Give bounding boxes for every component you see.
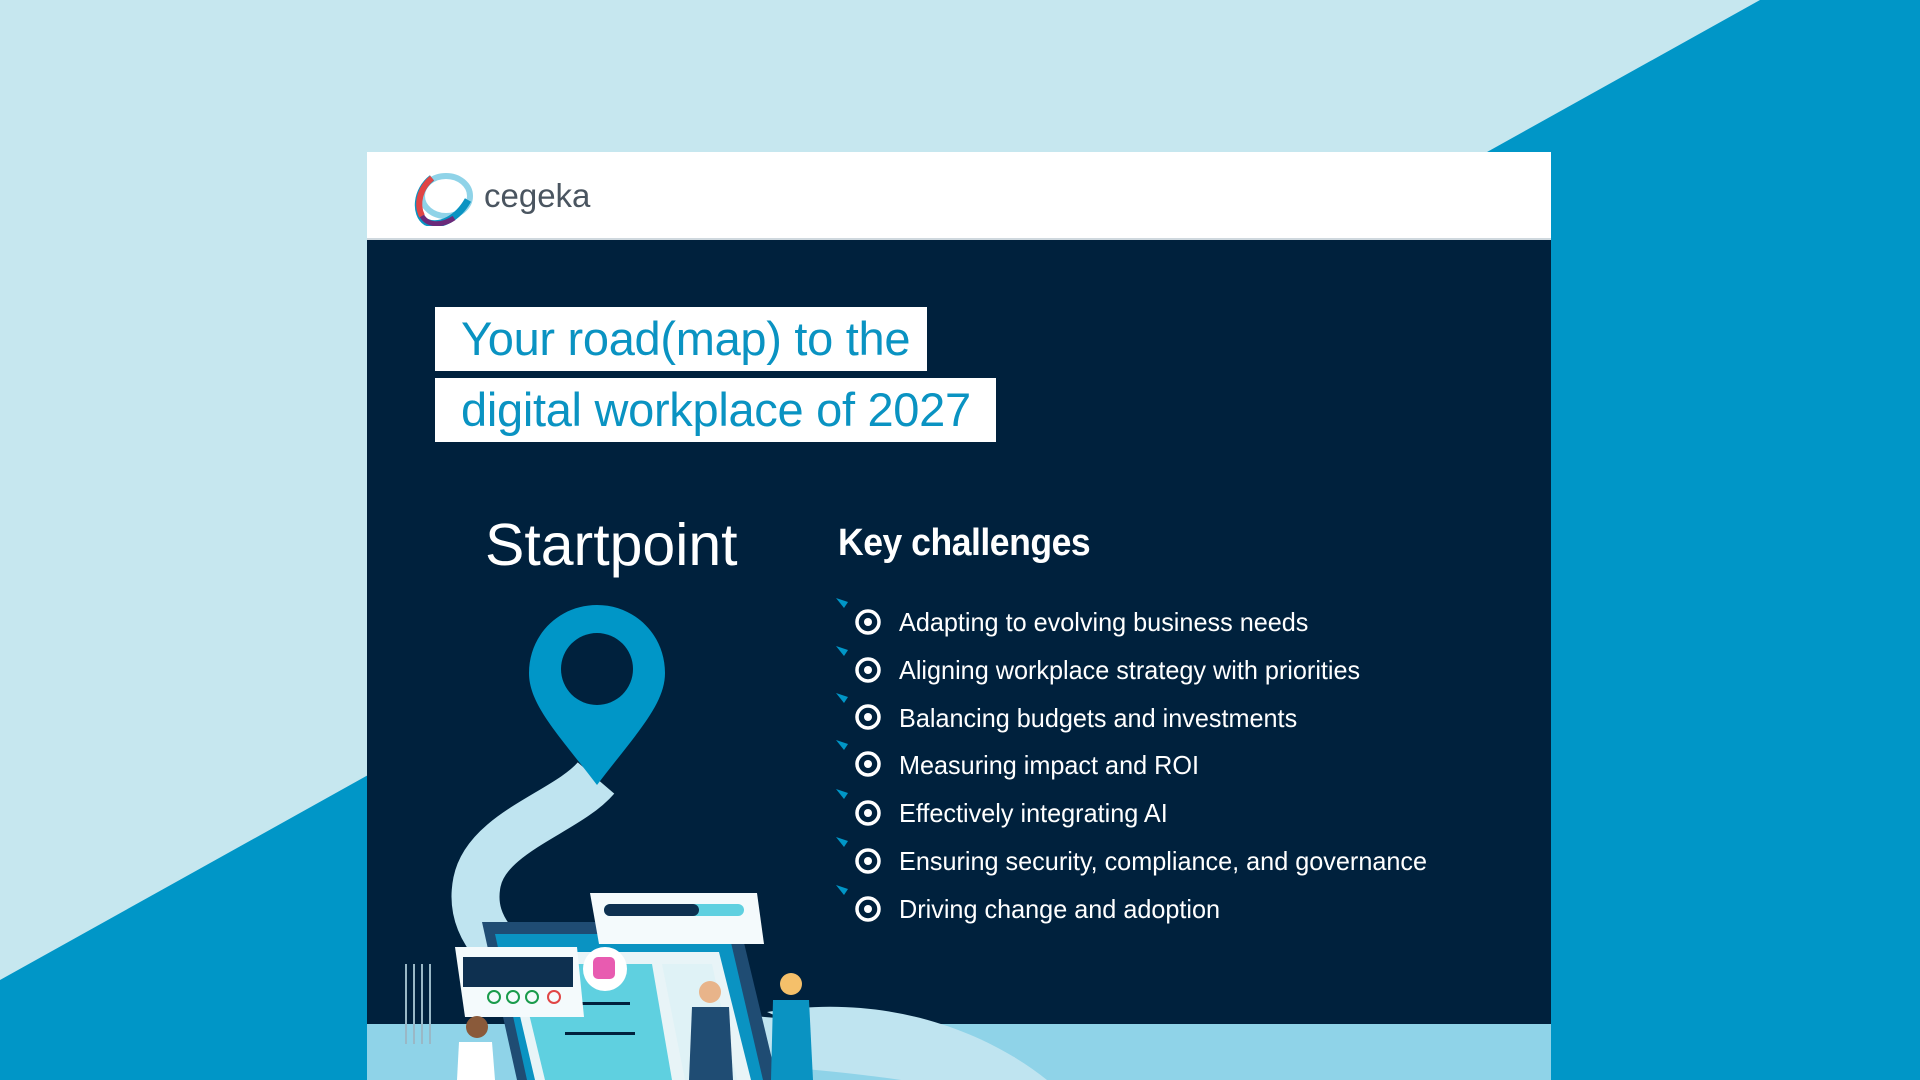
monitor (482, 922, 777, 1080)
dots (405, 964, 431, 1044)
title (435, 307, 996, 442)
logo (414, 173, 590, 226)
list: challenges: Adapting to evolving business needs (899, 607, 1308, 637)
people (466, 1016, 488, 1038)
list: challenges: Driving change and adoption (899, 894, 1220, 924)
card (367, 152, 1551, 1080)
icon: cegeka swirl (414, 173, 473, 226)
list: challenges: Effectively integrating AI (899, 798, 1168, 828)
heading: startpoint: Startpoint (485, 512, 738, 578)
logo text: cegeka (484, 177, 590, 214)
icon: location pin (529, 605, 665, 785)
popups (455, 947, 584, 1017)
list: challenges: Ensuring security, compliance, and governance (899, 846, 1427, 876)
header bar (367, 152, 1551, 240)
list: challenges: Balancing budgets and investments (899, 703, 1297, 733)
title: Your road(map) to the (461, 312, 910, 365)
title: digital workplace of 2027 (461, 383, 971, 436)
list: challenges: Measuring impact and ROI (899, 750, 1199, 780)
road and illustration (367, 762, 1551, 1080)
list: challenges: Aligning workplace strategy with priorities (899, 655, 1360, 685)
list: challenges (836, 598, 1427, 924)
heading: key challenges: Key challenges (838, 522, 1090, 564)
